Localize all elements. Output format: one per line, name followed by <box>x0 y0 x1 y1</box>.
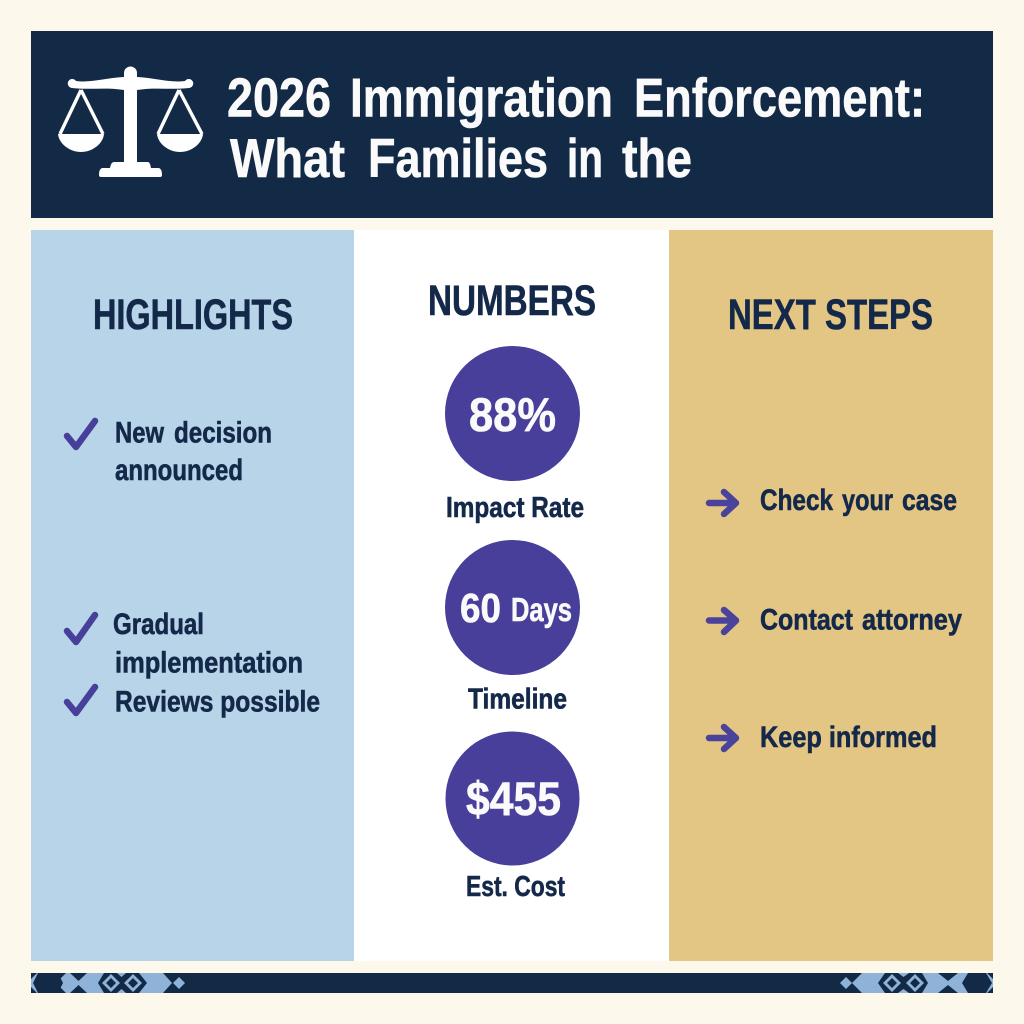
title: the <box>622 127 692 189</box>
icon: arrow 2 <box>709 610 736 632</box>
heading: numbers: NUMBERS <box>428 277 596 325</box>
icon: scales of justice <box>58 67 203 177</box>
text: new decision announced <box>115 416 272 487</box>
text: keep informed: Keep informed <box>760 721 937 754</box>
title: 2026 <box>227 66 331 128</box>
heading: next steps: NEXT STEPS <box>728 291 933 339</box>
stat: estimated cost: $455 <box>466 772 561 825</box>
title: What <box>230 127 345 189</box>
text: gradual implementation: implementation <box>115 646 303 680</box>
text: reviews possible: Reviews possible <box>115 686 320 718</box>
text: contact attorney <box>760 604 962 636</box>
text: new decision announced: New <box>115 416 165 450</box>
icon: arrow 1 <box>709 492 736 514</box>
pattern: left <box>31 973 185 993</box>
pattern: right <box>840 973 993 993</box>
stat: impact rate: 88% <box>469 388 556 441</box>
title <box>227 66 925 189</box>
text: contact attorney: attorney <box>862 604 962 636</box>
text: gradual implementation: Gradual <box>113 608 204 641</box>
footer pattern band <box>31 973 993 993</box>
stat: impact rate: Impact Rate <box>446 492 584 524</box>
stat: timeline <box>445 540 580 716</box>
text: new decision announced: decision <box>174 416 272 450</box>
icon: check 2 <box>67 615 95 642</box>
icon: check 3 <box>67 687 95 713</box>
panel: highlights <box>31 230 354 961</box>
text: new decision announced: announced <box>115 454 243 487</box>
title: Enforcement: <box>634 66 925 128</box>
stat: timeline: Timeline <box>468 684 567 716</box>
panel: next steps <box>669 230 993 961</box>
stat: timeline: 60 <box>460 585 501 631</box>
icon: arrow 3 <box>709 727 736 749</box>
panel: numbers <box>354 230 669 961</box>
text: contact attorney: Contact <box>760 604 853 636</box>
text: check your case <box>760 484 957 517</box>
text: check your case: case <box>902 484 957 517</box>
title: Immigration <box>350 66 613 128</box>
stat: estimated cost: Est. Cost <box>466 871 565 903</box>
text: check your case: your <box>842 484 893 517</box>
stat: impact rate <box>445 346 584 524</box>
text: check your case: Check <box>760 484 833 517</box>
header banner <box>31 31 993 218</box>
title: Families <box>368 127 548 189</box>
stat: estimated cost <box>446 732 580 903</box>
title: in <box>567 127 603 189</box>
heading: highlights: HIGHLIGHTS <box>93 291 293 339</box>
text: gradual implementation <box>113 608 303 680</box>
icon: check 1 <box>67 421 95 447</box>
stat: timeline: Days <box>511 591 572 628</box>
